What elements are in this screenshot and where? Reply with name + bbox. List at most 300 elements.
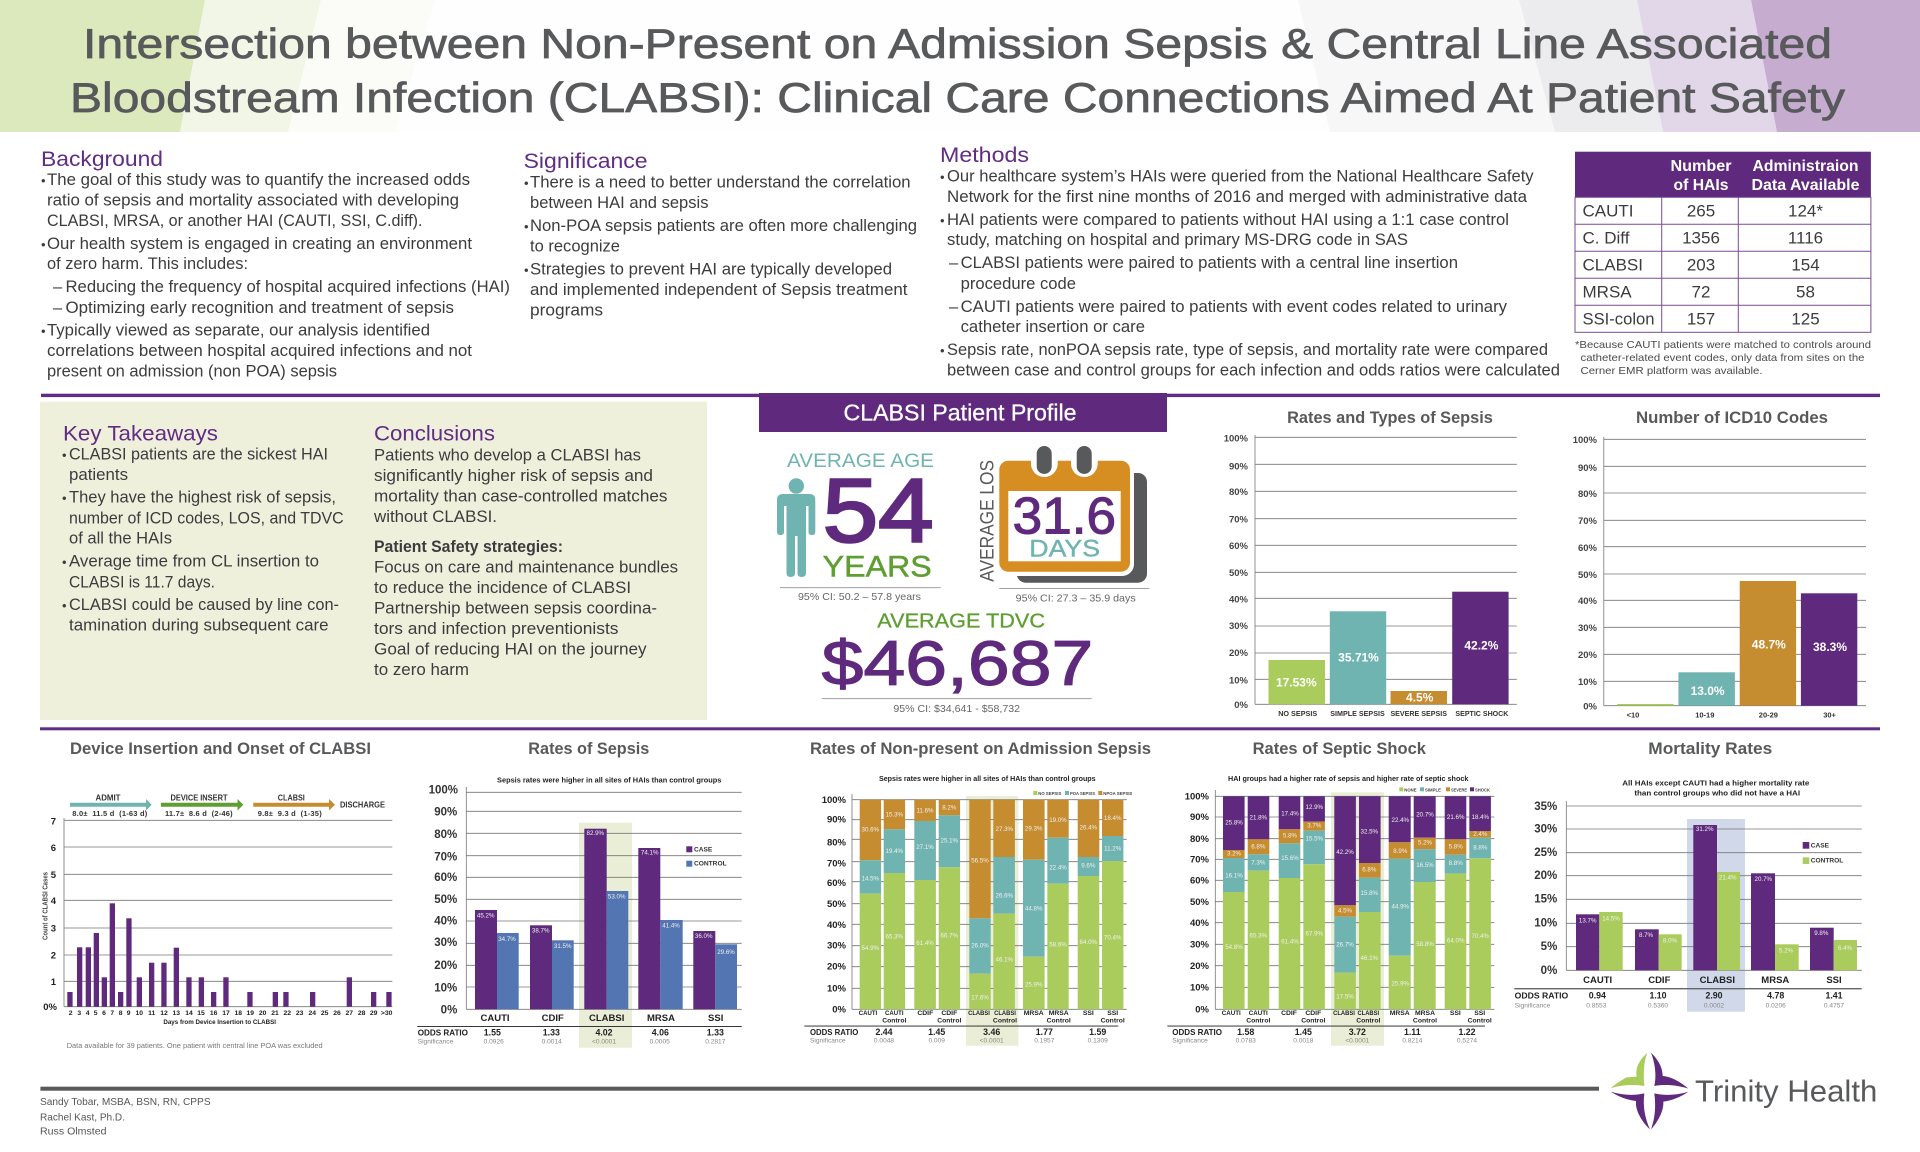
stacked bars: 3.2% <box>1227 851 1242 858</box>
logo wordmark: Trinity Health <box>1695 1075 1877 1109</box>
stacked bars: 9.6% <box>1081 862 1096 869</box>
stacked bars: 21.6% <box>1447 814 1465 821</box>
text: conclusions: without CLABSI. <box>373 508 497 526</box>
chart subtitle <box>1622 779 1809 797</box>
odds ratios: 3.72 <box>1349 1027 1366 1037</box>
x axis labels: SSI <box>1450 1010 1461 1017</box>
panel: background: – <box>53 299 63 317</box>
title: Intersection between Non-Present on Admission Sepsis & Central Line Associated <box>83 20 1832 67</box>
y axis labels: 90% <box>1229 462 1249 472</box>
x axis labels: Control <box>993 1017 1017 1024</box>
bars: 45.2% <box>477 913 495 920</box>
y axis labels: 40% <box>1190 918 1210 929</box>
y axis labels <box>1573 435 1598 712</box>
x axis title: Days from Device Insertion to CLABSI <box>163 1019 276 1026</box>
chart: device insertion and onset of CLABSI <box>40 739 393 1050</box>
bars: 31.5% <box>554 943 572 950</box>
panel: background <box>41 148 510 381</box>
panel: significance: to recognize <box>530 238 620 256</box>
timeline arrows: 8.0± 11.5 d (1-63 d) <box>72 809 148 818</box>
panel: background: Our health system is engaged in creating an environment <box>47 235 472 253</box>
odds ratios: 3.46 <box>983 1027 1000 1037</box>
text: key takeaways list: • <box>62 491 67 506</box>
x axis labels: CAUTI <box>1249 1010 1268 1017</box>
bars: 20.7% <box>1755 876 1773 883</box>
text: key takeaways list: • <box>62 598 67 613</box>
text: key takeaways list: of all the HAIs <box>69 530 172 548</box>
chart: rates of non-present on admission sepsis <box>804 739 1151 1046</box>
odds ratios: 4.06 <box>652 1028 669 1038</box>
icon: cross mark <box>1611 1053 1688 1129</box>
odds ratios: 0.0048 <box>874 1037 894 1044</box>
x axis labels: Control <box>937 1017 961 1024</box>
x axis labels: >30 <box>381 1010 393 1017</box>
y axis labels: 90% <box>1578 463 1598 474</box>
y axis labels: 50% <box>827 899 847 910</box>
odds ratios: <0.0001 <box>1345 1037 1370 1044</box>
legend: POA SEPSIS <box>1070 791 1095 796</box>
panel: significance: and implemented independent of Sepsis treatment <box>530 281 908 299</box>
bars: 42.2% <box>1464 638 1499 652</box>
y axis labels: 80% <box>827 838 847 848</box>
highlight: CLABSI <box>1687 819 1745 1012</box>
x axis labels: Control <box>1356 1017 1380 1024</box>
panel: methods: – <box>949 254 959 272</box>
x axis labels: CAUTI <box>1583 975 1612 986</box>
stacked bars: 61.4% <box>916 940 934 947</box>
panel: background: present on admission (non POA) sepsis <box>47 363 337 381</box>
panel: significance: • <box>524 263 529 278</box>
bars: 34.7% <box>498 936 516 943</box>
odds ratios: 0.0018 <box>1293 1037 1314 1044</box>
odds ratios: 0.009 <box>928 1037 945 1044</box>
chart title: Mortality Rates <box>1648 739 1772 758</box>
y axis labels: 70% <box>1578 516 1598 527</box>
x axis labels: 18 <box>235 1010 242 1017</box>
panel: significance: programs <box>530 302 603 320</box>
text: conclusions <box>373 447 678 679</box>
panel: methods: study, matching on hospital and primary MS-DRG code in SAS <box>947 231 1408 249</box>
table: number of HAIs: 58 <box>1796 283 1815 302</box>
x axis labels: 20-29 <box>1759 711 1778 720</box>
y axis labels: 10% <box>1578 677 1598 688</box>
text: conclusions: mortality than case-controlled matches <box>374 488 668 506</box>
chart: number of ICD10 codes <box>1573 408 1866 720</box>
stacked bars: 27.1% <box>916 844 934 851</box>
odds ratios <box>810 1027 1108 1044</box>
y axis labels: 90% <box>1190 812 1210 823</box>
chart subtitle: than control groups who did not have a HAI <box>1634 788 1800 797</box>
x axis labels: Control <box>1413 1017 1437 1024</box>
legend: NONE <box>1404 787 1417 792</box>
x axis labels: Control <box>1468 1017 1492 1024</box>
y axis labels: 5% <box>1541 941 1557 953</box>
x axis labels: 16 <box>210 1010 218 1017</box>
odds ratios: ODDS RATIO <box>1172 1027 1222 1037</box>
highlight: CLABSI <box>966 796 1018 1046</box>
bars: 14.5% <box>1602 915 1620 922</box>
legend: SHOCK <box>1475 787 1491 792</box>
panel: methods <box>940 144 1560 380</box>
panel: methods: CAUTI patients were paired to patients with event codes related to urinary <box>961 298 1508 316</box>
text: conclusions: Patients who develop a CLABSI has <box>374 447 641 465</box>
legend: SIMPLE <box>1425 787 1441 792</box>
text: key takeaways list: • <box>62 447 67 462</box>
odds ratios: 1.45 <box>928 1027 945 1037</box>
authors <box>40 1096 211 1138</box>
panel: methods: • <box>940 170 945 185</box>
stacked bars: 18.4% <box>1472 814 1490 821</box>
y axis labels: 20% <box>1229 648 1249 659</box>
chart subtitle: All HAIs except CAUTI had a higher mortality rate <box>1622 779 1809 788</box>
timeline arrows: 9.8± 9.3 d (1-35) <box>258 809 322 818</box>
x axis labels: 10 <box>136 1010 143 1017</box>
chart: mortality rates <box>1514 739 1862 1012</box>
text: key takeaways list: They have the highest risk of sepsis, <box>69 489 336 507</box>
y axis labels: 0% <box>1195 1004 1210 1016</box>
x axis labels: 22 <box>284 1010 291 1017</box>
odds ratios: 0.5274 <box>1457 1037 1477 1044</box>
y axis labels: 30% <box>1190 940 1210 950</box>
y axis labels: 5 <box>51 870 57 881</box>
y axis labels: 30% <box>1534 824 1557 836</box>
x axis labels: CAUTI <box>885 1010 904 1017</box>
panel: background: Optimizing early recognition and treatment of sepsis <box>66 299 454 317</box>
odds ratios: 2.44 <box>875 1027 893 1037</box>
x axis labels: MRSA <box>647 1013 675 1024</box>
y axis labels: 50% <box>1190 897 1210 908</box>
y axis labels: 4 <box>51 896 57 907</box>
odds ratios: 0.0783 <box>1236 1037 1256 1044</box>
legend: CONTROL <box>1811 858 1843 865</box>
panel: methods: Sepsis rate, nonPOA sepsis rate, type of sepsis, and mortality rate were compared <box>947 341 1548 359</box>
panel: significance: between HAI and sepsis <box>530 194 708 212</box>
average TDVC label: AVERAGE TDVC <box>877 611 1045 633</box>
y axis labels: 10% <box>434 982 457 994</box>
x axis labels <box>1278 709 1509 718</box>
y axis labels: 40% <box>827 920 847 931</box>
stacked bars: 6.8% <box>1251 844 1266 851</box>
stacked bars: 21.8% <box>1250 815 1268 822</box>
authors: Russ Olmsted <box>40 1126 107 1138</box>
odds ratios: ODDS RATIO <box>1515 991 1569 1001</box>
odds ratios: 0.5360 <box>1648 1002 1668 1009</box>
stacked bars: 17.6% <box>971 994 989 1001</box>
odds ratios: ODDS RATIO <box>418 1028 468 1038</box>
odds ratios: 1.22 <box>1458 1027 1476 1037</box>
x axis labels: 21 <box>271 1010 279 1017</box>
x axis labels: MRSA <box>1390 1010 1410 1017</box>
stacked bars: 15.8% <box>1361 890 1379 897</box>
stacked bars: 5.8% <box>1283 832 1298 839</box>
heading: methods: Methods <box>940 144 1029 167</box>
text: conclusions: to zero harm <box>374 661 469 679</box>
stacked bars: 15.3% <box>886 812 904 819</box>
x axis labels: CLABSI <box>1333 1010 1355 1017</box>
text: conclusions: Partnership between sepsis coordina- <box>374 600 657 618</box>
timeline arrows <box>70 792 385 818</box>
text: conclusions: Patient Safety strategies: <box>374 538 563 556</box>
legend <box>686 846 727 868</box>
stacked bars: 15.6% <box>1281 855 1299 862</box>
profile heading <box>759 393 1167 432</box>
y axis labels: 30% <box>1229 621 1249 632</box>
bars: 36.0% <box>695 933 713 940</box>
table footnote <box>1575 339 1871 377</box>
icon: calendar <box>995 440 1147 583</box>
highlight: CLABSI <box>1331 792 1384 1046</box>
y axis labels <box>1224 434 1249 711</box>
table footnote: *Because CAUTI patients were matched to controls around <box>1575 339 1871 351</box>
x axis labels: CAUTI <box>1222 1010 1241 1017</box>
y axis labels: 3 <box>51 924 56 934</box>
odds ratios: 1.33 <box>707 1028 724 1038</box>
stacked bars: 61.4% <box>1281 939 1299 946</box>
panel: methods: – <box>949 298 959 316</box>
stacked bars: 46.1% <box>1361 955 1379 962</box>
odds ratios: 0.2817 <box>705 1038 726 1045</box>
stacked bars <box>1223 796 1491 1009</box>
bars <box>1268 592 1509 705</box>
stacked bars: 54.8% <box>1225 944 1243 951</box>
x axis labels: 23 <box>296 1010 304 1017</box>
stacked bars: 3.7% <box>1307 823 1322 830</box>
bars <box>67 903 392 1007</box>
legend: NPOA SEPSIS <box>1103 791 1132 796</box>
stacked bars: 26.6% <box>996 892 1014 899</box>
x axis labels: CLABSI <box>968 1010 990 1017</box>
legend: CONTROL <box>694 861 727 868</box>
x axis labels: Control <box>882 1017 906 1024</box>
odds ratios <box>1172 1027 1477 1044</box>
table: number of HAIs: CAUTI <box>1582 202 1634 221</box>
odds ratios: Significance <box>810 1037 846 1044</box>
stacked bars: 70.4% <box>1472 933 1490 940</box>
y axis labels: 60% <box>827 878 847 889</box>
odds ratios: 2.90 <box>1705 991 1723 1001</box>
text: conclusions: significantly higher risk of sepsis and <box>374 467 653 485</box>
y axis labels: 0% <box>832 1004 847 1016</box>
y axis labels: 6 <box>51 843 56 854</box>
chart title: Number of ICD10 Codes <box>1636 408 1828 427</box>
x axis labels <box>1627 711 1837 720</box>
bars: 6.4% <box>1838 945 1853 952</box>
stacked bars: 20.7% <box>1416 812 1434 819</box>
x axis labels: 25 <box>321 1010 329 1017</box>
y axis labels <box>822 795 847 1016</box>
y axis labels: 20% <box>827 962 847 972</box>
y axis title: Count of CLABSI Cases <box>40 872 50 940</box>
stacked bars: 4.5% <box>1338 908 1353 915</box>
y axis labels: 80% <box>1190 834 1210 845</box>
odds ratios <box>418 1028 726 1045</box>
stacked bars <box>860 800 1123 1009</box>
heading: conclusions: Conclusions <box>374 423 495 446</box>
x axis labels: NO SEPSIS <box>1278 709 1317 718</box>
stacked bars: 8.2% <box>942 804 957 811</box>
x axis labels: 7 <box>110 1010 114 1017</box>
stacked bars: 19.0% <box>1049 817 1067 824</box>
stacked bars: 32.5% <box>1361 829 1379 836</box>
years label: YEARS <box>823 551 932 584</box>
title <box>70 20 1845 121</box>
odds ratios: 0.0005 <box>650 1038 670 1045</box>
x axis labels <box>480 1013 723 1024</box>
stacked bars: 29.3% <box>1025 825 1043 832</box>
timeline arrows: DEVICE INSERT <box>170 792 228 802</box>
chart: rates of sepsis <box>417 739 742 1048</box>
stacked bars: 8.8% <box>1473 844 1488 851</box>
x axis labels: 4 <box>86 1010 90 1017</box>
bars <box>1617 581 1857 706</box>
y axis labels: 30% <box>1578 623 1598 634</box>
odds ratios: 1.45 <box>1295 1027 1312 1037</box>
chart subtitle: Sepsis rates were higher in all sites of HAIs than control groups <box>879 774 1096 783</box>
table: number of HAIs <box>1575 152 1871 332</box>
table footnote: Cerner EMR platform was available. <box>1580 365 1762 377</box>
stacked bars: 26.7% <box>1336 942 1354 949</box>
legend <box>1803 842 1843 865</box>
stacked bars: 44.9% <box>1392 904 1410 911</box>
y axis labels <box>1185 792 1210 1016</box>
bars <box>1576 825 1857 970</box>
stacked bars: 22.4% <box>1392 817 1410 824</box>
x axis labels: 20 <box>259 1010 267 1017</box>
x axis labels: CAUTI <box>859 1010 877 1017</box>
bars: 38.3% <box>1813 640 1847 654</box>
y axis labels: 100% <box>1573 435 1598 446</box>
y axis labels: 20% <box>1190 961 1210 972</box>
y axis labels: 10% <box>1229 676 1249 686</box>
timeline arrows: ADMIT <box>96 792 121 802</box>
odds ratios: 1.59 <box>1089 1027 1106 1037</box>
legend: SEVERE <box>1451 787 1467 792</box>
stacked bars: 12.9% <box>1306 804 1324 811</box>
x axis labels: 24 <box>309 1010 316 1017</box>
panel: background: • <box>41 173 46 188</box>
x axis labels: <10 <box>1627 711 1639 720</box>
y axis labels: 20% <box>1578 650 1598 661</box>
panel: methods: • <box>940 343 945 358</box>
y axis labels <box>43 816 58 1013</box>
chart title: Rates of Septic Shock <box>1253 739 1426 758</box>
average LOS value: 31.6 <box>1013 487 1116 545</box>
x axis labels: CDIF <box>1281 1010 1297 1017</box>
y axis labels: 90% <box>827 814 847 826</box>
text: key takeaways list: number of ICD codes, LOS, and TDVC <box>69 509 344 527</box>
chart title: Rates of Non-present on Admission Sepsis <box>810 739 1151 758</box>
text: key takeaways list: • <box>62 555 67 570</box>
panel: significance: • <box>524 176 529 191</box>
x axis labels: CDIF <box>1648 975 1671 986</box>
panel: background: • <box>41 237 46 252</box>
authors: Rachel Kast, Ph.D. <box>40 1112 125 1124</box>
x axis labels: MRSA <box>1415 1010 1435 1017</box>
stacked bars: 66.7% <box>941 932 959 939</box>
authors: Sandy Tobar, MSBA, BSN, RN, CPPS <box>40 1096 211 1108</box>
y axis labels: 40% <box>1578 596 1598 607</box>
y axis labels: 70% <box>434 851 457 863</box>
x axis labels: 27 <box>346 1010 353 1017</box>
timeline arrows: DISCHARGE <box>340 800 385 810</box>
odds ratios: ODDS RATIO <box>810 1027 859 1037</box>
x axis labels: CDIF <box>917 1010 933 1017</box>
stacked bars: 16.1% <box>1225 873 1243 880</box>
y axis labels: 0% <box>1583 702 1598 712</box>
legend: NO SEPSIS <box>1038 791 1061 796</box>
x axis labels: SEPTIC SHOCK <box>1455 709 1509 718</box>
odds ratios: 0.1957 <box>1034 1037 1055 1044</box>
stacked bars: 67.9% <box>1306 930 1324 937</box>
days label: DAYS <box>1029 536 1100 563</box>
y axis labels: 0% <box>1541 965 1557 977</box>
chart subtitle: HAI groups had a higher rate of sepsis and higher rate of septic shock <box>1228 774 1469 783</box>
bars <box>475 829 737 1009</box>
legend: CASE <box>694 846 713 853</box>
table: number of HAIs: 203 <box>1687 256 1715 275</box>
title: Bloodstream Infection (CLABSI): Clinical Care Connections Aimed At Patient Safety <box>70 74 1845 121</box>
legend <box>1399 787 1491 792</box>
y axis labels: 100% <box>1185 792 1210 802</box>
odds ratios: Significance <box>418 1038 454 1045</box>
stacked bars: 8.8% <box>1449 860 1463 867</box>
x axis labels: 8 <box>119 1010 123 1017</box>
y axis labels: 7 <box>51 816 56 828</box>
chart: rates of septic shock <box>1167 739 1494 1046</box>
text: conclusions: to reduce the incidence of CLABSI <box>374 579 631 597</box>
text: conclusions: tors and infection preventionists <box>374 620 618 638</box>
panel: methods: Network for the first nine months of 2016 and merged with administrative data <box>947 188 1528 206</box>
heading: key takeaways: Key Takeaways <box>63 423 218 446</box>
x axis labels: 15 <box>197 1010 205 1017</box>
panel: background: of zero harm. This includes: <box>47 255 248 273</box>
stacked bars: 42.2% <box>1336 849 1354 856</box>
table: number of HAIs: 1356 <box>1682 229 1720 248</box>
stacked bars: 65.3% <box>1250 932 1268 939</box>
table: number of HAIs: of HAIs <box>1674 177 1729 194</box>
table: number of HAIs: Number <box>1670 158 1732 175</box>
panel: methods: Our healthcare system’s HAIs were queried from the National Healthcare Safety <box>947 168 1534 186</box>
y axis labels: 30% <box>827 940 847 952</box>
bars: 9.8% <box>1814 930 1829 937</box>
y axis labels: 100% <box>822 795 847 806</box>
bars: 13.7% <box>1579 917 1597 924</box>
stacked bars: 14.5% <box>862 876 880 883</box>
bars: 21.4% <box>1719 875 1737 882</box>
stacked bars: 70.4% <box>1104 934 1122 941</box>
stacked bars: 58.8% <box>1416 941 1434 948</box>
stacked bars: 25.9% <box>1025 982 1043 989</box>
table: number of HAIs: 154 <box>1791 256 1820 275</box>
stacked bars: 54.9% <box>862 945 880 952</box>
odds ratios: 0.0002 <box>1704 1002 1724 1009</box>
x axis labels: 3 <box>77 1010 81 1017</box>
legend <box>1033 791 1132 796</box>
average TDVC value: $46,687 <box>822 629 1093 699</box>
chart title: Rates of Sepsis <box>528 739 649 758</box>
x axis labels: SSI <box>1474 1010 1485 1017</box>
x axis labels <box>859 1010 1125 1024</box>
x axis labels: CLABSI <box>994 1010 1016 1017</box>
chart note: Data available for 39 patients. One patient with central line POA was excluded <box>67 1041 323 1050</box>
y axis labels: 80% <box>1229 487 1249 498</box>
y axis labels: 10% <box>827 984 847 994</box>
x axis labels: 12 <box>160 1010 168 1017</box>
stacked bars: 2.4% <box>1473 831 1488 838</box>
bars: 38.7% <box>532 927 550 934</box>
odds ratios: <0.0001 <box>980 1037 1004 1044</box>
text: key takeaways list: tamination during subsequent care <box>69 617 329 635</box>
